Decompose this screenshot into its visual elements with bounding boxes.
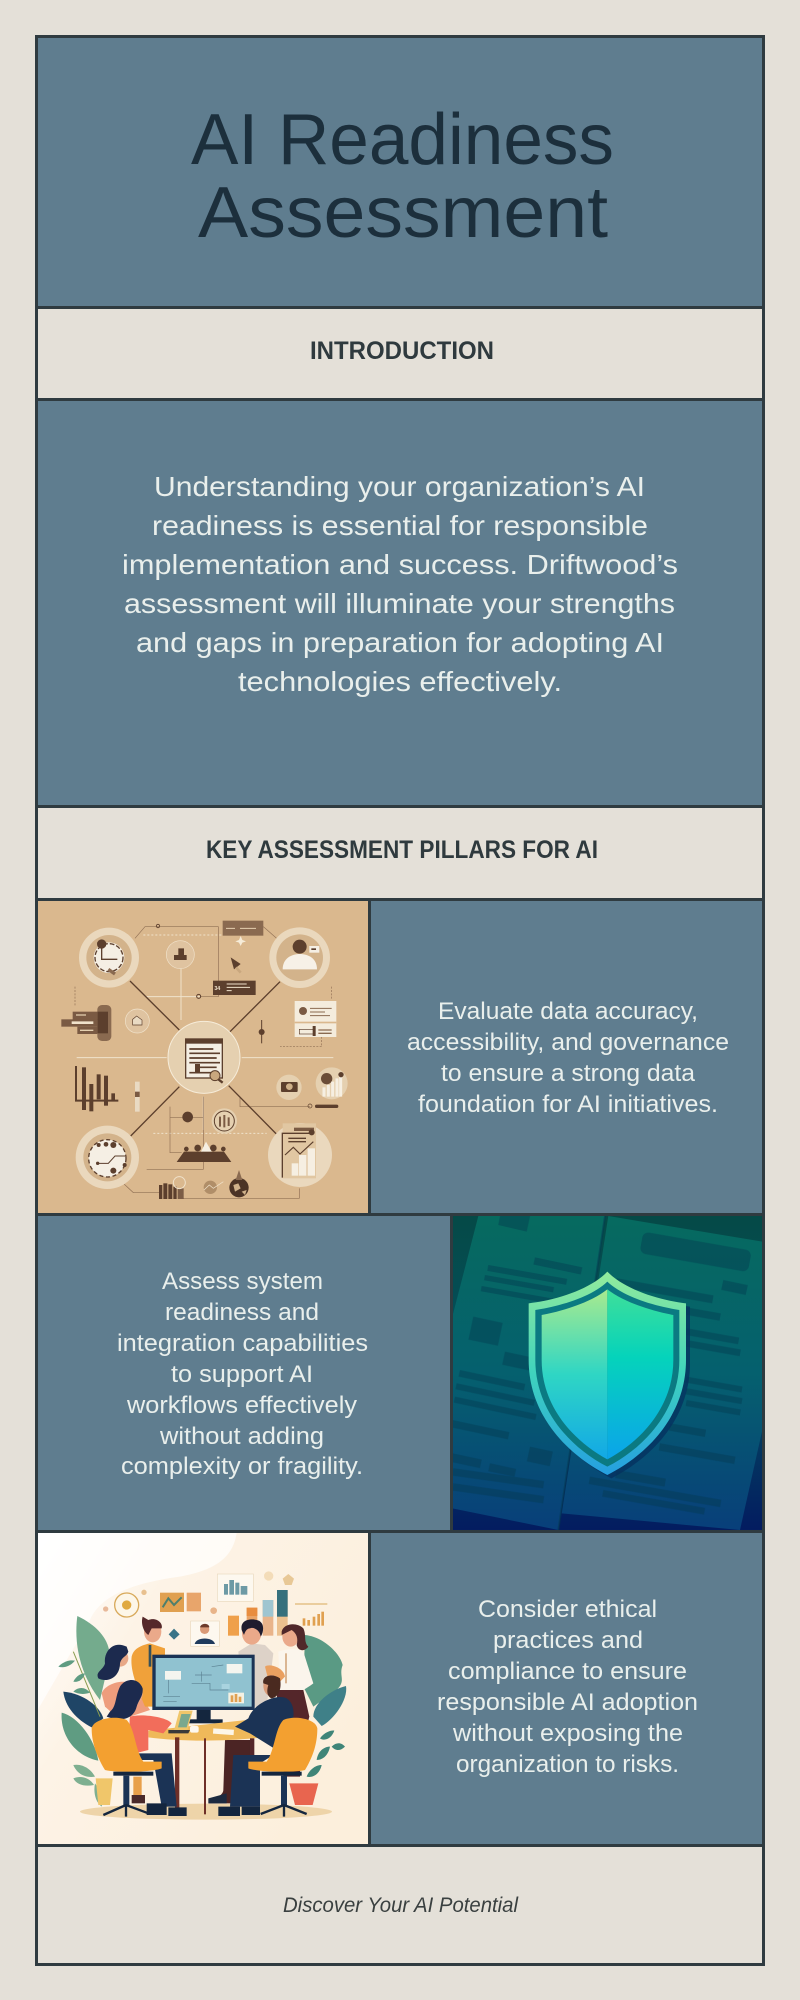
- introduction panel: technologies effectively.: [238, 666, 562, 697]
- bottom right node: growth chart: [268, 1123, 332, 1187]
- wall decorations: [103, 1571, 327, 1646]
- pillar 3 text panel: without exposing the: [452, 1720, 683, 1747]
- title panel: [36, 36, 764, 307]
- seated man: [218, 1675, 294, 1816]
- card right: [295, 1001, 336, 1037]
- pillar 1 text panel: accessibility, and governance: [407, 1029, 729, 1056]
- monitor: [152, 1655, 255, 1723]
- top right node: person: [269, 927, 330, 988]
- printer left: [61, 1005, 111, 1041]
- small icon badges: [125, 941, 348, 1134]
- bar chart left: [76, 1066, 140, 1112]
- right chair: [248, 1718, 317, 1817]
- pillar 3 text panel: organization to risks.: [456, 1751, 679, 1778]
- title: AI Readiness: [191, 100, 614, 180]
- table: [148, 1711, 263, 1814]
- pillar 2 text panel: complexity or fragility.: [121, 1453, 363, 1480]
- pillar 3 text panel: compliance to ensure: [448, 1658, 687, 1685]
- pillar 1 image: data network illustration: [38, 901, 368, 1214]
- introduction panel: implementation and success. Driftwood’s: [122, 549, 678, 580]
- introduction panel: readiness is essential for responsible: [152, 510, 648, 541]
- left chair: [92, 1718, 162, 1817]
- pillar 2 text panel: readiness and: [165, 1299, 319, 1326]
- bottom left node: dial: [76, 1126, 139, 1189]
- pillar 1 text panel: to ensure a strong data: [441, 1060, 696, 1087]
- pillars heading: [36, 808, 764, 898]
- title: Assessment: [198, 173, 608, 253]
- pillar 3 text panel: Consider ethical: [478, 1596, 657, 1623]
- shield icon: [529, 1272, 690, 1478]
- footer tagline: Discover Your AI Potential: [283, 1894, 519, 1917]
- pillar 3 image: team around a monitor: [38, 1533, 368, 1845]
- title: [191, 100, 614, 253]
- seated woman: [107, 1680, 187, 1816]
- standing woman right: [265, 1624, 313, 1777]
- pillar 3 text panel: [370, 1533, 764, 1844]
- introduction panel: assessment will illuminate your strengths: [124, 588, 675, 619]
- introduction heading: INTRODUCTION: [310, 337, 494, 365]
- pillar 1 text panel: Evaluate data accuracy,: [438, 998, 698, 1025]
- pillar 1 text panel: [370, 900, 764, 1214]
- pillar 2 text panel: [36, 1216, 450, 1530]
- standing man grey shirt: [208, 1619, 273, 1803]
- pillar 2 text panel: without adding: [159, 1423, 324, 1450]
- introduction heading: [36, 308, 764, 398]
- floor shadow: [80, 1804, 332, 1820]
- footer tagline: [36, 1847, 764, 1963]
- centre hub: [168, 1021, 240, 1093]
- top label boxes and cursor: 34: [214, 986, 220, 992]
- standing man with orange sweater: [131, 1617, 165, 1803]
- plants: [58, 1616, 346, 1807]
- introduction panel: Understanding your organization’s AI: [154, 471, 645, 502]
- audience mountain: [177, 1142, 231, 1162]
- pillar 1 text panel: foundation for AI initiatives.: [418, 1091, 718, 1118]
- pillars heading: KEY ASSESSMENT PILLARS FOR AI: [206, 836, 598, 864]
- top label boxes and cursor: [156, 921, 263, 998]
- pillar 2 text panel: integration capabilities: [117, 1330, 368, 1357]
- pillar 2 text panel: workflows effectively: [126, 1392, 357, 1419]
- pillar 2 text panel: to support AI: [171, 1361, 313, 1388]
- introduction panel: and gaps in preparation for adopting AI: [136, 627, 664, 658]
- bottom books and globe: [159, 1104, 338, 1199]
- pillar 3 text panel: responsible AI adoption: [437, 1689, 698, 1716]
- introduction panel: [36, 400, 764, 806]
- pillar 2 text panel: Assess system: [162, 1268, 323, 1295]
- pillar 3 text panel: practices and: [493, 1627, 643, 1654]
- connector lines: [130, 981, 280, 1136]
- pillar 2 image: shield over documents: [451, 1216, 762, 1530]
- left standing woman: [98, 1645, 150, 1720]
- top left node: clock: [79, 928, 139, 988]
